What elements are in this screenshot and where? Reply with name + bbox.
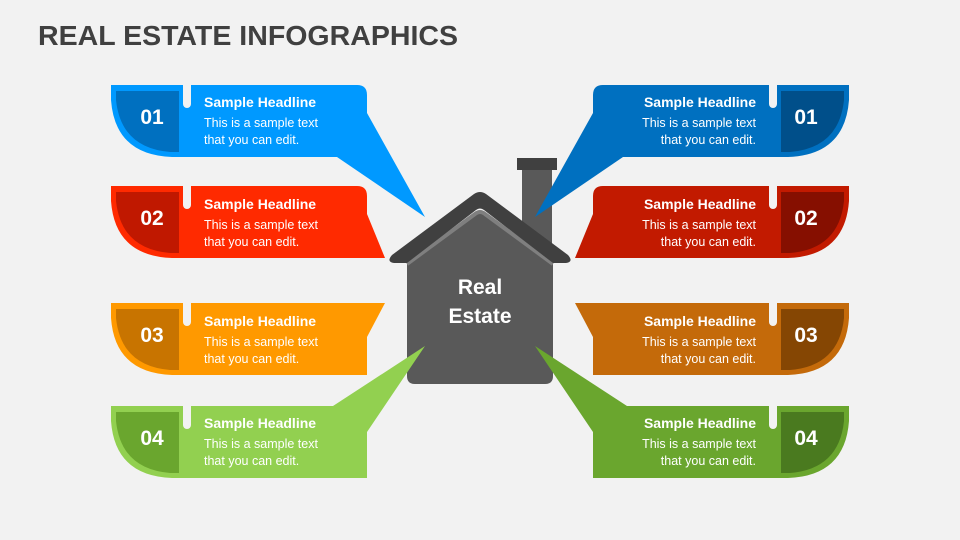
panel: left 03: This is a sample text <box>204 335 318 349</box>
panel: left 04: This is a sample text <box>204 437 318 451</box>
panel: left 04 <box>111 346 425 478</box>
panel: left 02: Sample Headline <box>204 196 316 212</box>
panel: right 04: 04 <box>794 427 818 450</box>
panel: right 01: Sample Headline <box>644 94 756 110</box>
panel: right 02: This is a sample text <box>642 218 757 232</box>
title: REAL ESTATE INFOGRAPHICS <box>38 20 458 51</box>
house: Real <box>458 276 502 299</box>
panel: left 03: Sample Headline <box>204 313 316 329</box>
panel: right 02: Sample Headline <box>644 196 756 212</box>
panel: right 02: 02 <box>794 207 818 230</box>
panel: left 04: 04 <box>140 427 164 450</box>
panel: left 01: Sample Headline <box>204 94 316 110</box>
panel: left 03 <box>111 303 385 375</box>
panel: right 02: that you can edit. <box>661 235 756 249</box>
panel: left 03: that you can edit. <box>204 352 299 366</box>
panel: right 03 <box>575 303 849 375</box>
house <box>389 158 571 384</box>
panel: right 02 <box>575 186 849 258</box>
panel: left 01: 01 <box>140 106 164 129</box>
panel: right 03: Sample Headline <box>644 313 756 329</box>
panel: right 01 <box>535 85 849 217</box>
panel: left 04: that you can edit. <box>204 454 299 468</box>
panel: right 03: that you can edit. <box>661 352 756 366</box>
panel: left 01 <box>111 85 425 217</box>
panel: left 02: that you can edit. <box>204 235 299 249</box>
panel: right 01: This is a sample text <box>642 116 757 130</box>
panel: right 03: 03 <box>794 324 818 347</box>
panel: right 03: This is a sample text <box>642 335 757 349</box>
panel: right 04: that you can edit. <box>661 454 756 468</box>
panel: left 02: This is a sample text <box>204 218 318 232</box>
panel: left 01: that you can edit. <box>204 133 299 147</box>
panel: right 01: that you can edit. <box>661 133 756 147</box>
panel: left 01: This is a sample text <box>204 116 318 130</box>
panel: right 01: 01 <box>794 106 818 129</box>
panel: left 03: 03 <box>140 324 164 347</box>
panel: left 02: 02 <box>140 207 164 230</box>
panel: right 04 <box>535 346 849 478</box>
panel: right 04: Sample Headline <box>644 415 756 431</box>
panel: left 04: Sample Headline <box>204 415 316 431</box>
house: Estate <box>448 305 512 328</box>
panel: right 04: This is a sample text <box>642 437 757 451</box>
panel: left 02 <box>111 186 385 258</box>
